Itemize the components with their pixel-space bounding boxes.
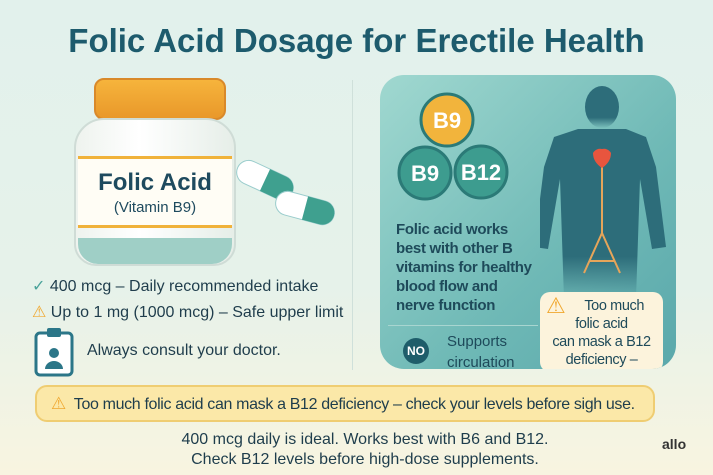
summary text: Check B12 levels before high-dose supplements.	[191, 451, 539, 468]
label	[78, 156, 232, 228]
title: Folic Acid Dosage for Erectile Health	[68, 22, 645, 59]
supports text: Supports	[447, 333, 507, 350]
callout: can mask a B12	[552, 334, 651, 350]
body silhouette	[540, 86, 666, 292]
summary text: 400 mcg daily is ideal. Works best with B6 and B12.	[182, 431, 548, 448]
panel text: blood flow and	[396, 278, 498, 295]
logo: allo	[662, 436, 686, 452]
callout: deficiency –	[566, 352, 637, 368]
vitamin circles	[398, 92, 508, 200]
panel text: Folic acid works	[396, 221, 508, 238]
callout: Too much	[584, 298, 644, 314]
panel text: vitamins for healthy	[396, 259, 532, 276]
label: (Vitamin B9)	[114, 199, 196, 216]
callout: ⚠	[546, 293, 565, 318]
icon: doctor clipboard	[34, 328, 74, 376]
cap	[94, 78, 226, 120]
icon: NO	[403, 338, 429, 364]
dosage list	[32, 278, 344, 321]
consult text: Always consult your doctor.	[87, 342, 281, 359]
callout	[540, 292, 663, 372]
warning banner: ⚠ Too much folic acid can mask a B12 deficiency – check your levels before sigh use.	[51, 394, 635, 413]
bottle body	[74, 118, 236, 266]
capsules	[236, 160, 335, 226]
bottle illustration	[74, 78, 236, 266]
icon: NO: NO	[407, 344, 425, 358]
panel text: nerve function	[396, 297, 495, 314]
vitamin circles: B9	[433, 108, 461, 133]
dosage list: ✓ 400 mcg – Daily recommended intake	[32, 278, 318, 295]
summary text	[182, 431, 548, 468]
vitamin circles: B12	[461, 160, 501, 185]
supports text	[447, 333, 515, 369]
vitamin circles: B9	[411, 161, 439, 186]
panel text: best with other B	[396, 240, 513, 257]
panel text	[396, 221, 532, 314]
dosage list: ⚠ Up to 1 mg (1000 mcg) – Safe upper limit	[32, 304, 343, 321]
label: Folic Acid	[98, 169, 212, 196]
panel: B vitamins	[380, 75, 676, 369]
callout: folic acid	[575, 316, 628, 332]
warning banner	[35, 385, 655, 422]
